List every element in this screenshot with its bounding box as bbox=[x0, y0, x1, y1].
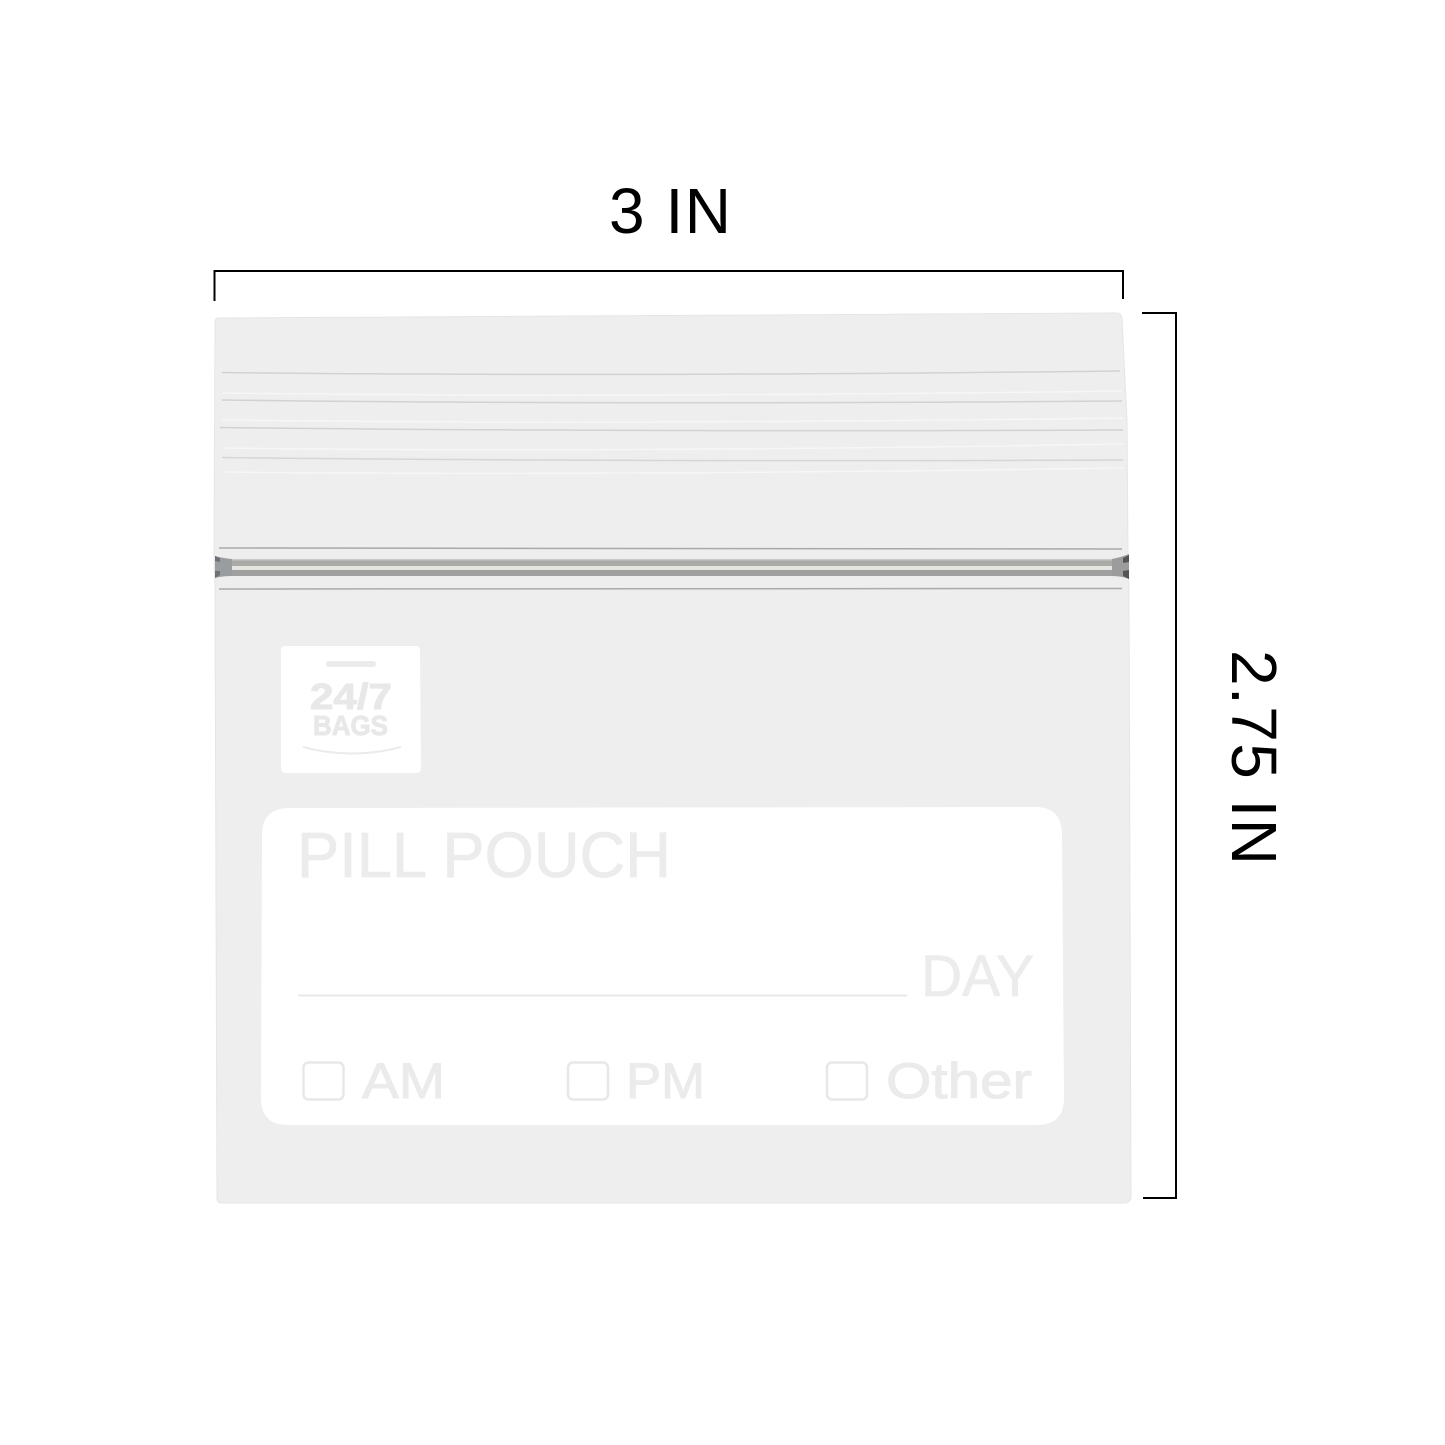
resealable flap lines bbox=[220, 371, 1124, 473]
day text: DAY bbox=[921, 944, 1034, 1009]
other checkbox bbox=[827, 1053, 1032, 1109]
height dimension label: 2.75 IN bbox=[1218, 650, 1290, 865]
width bracket bbox=[214, 271, 1123, 301]
brand logo: 24/7 bbox=[310, 676, 392, 717]
AM checkbox bbox=[304, 1053, 445, 1109]
label panel bbox=[261, 807, 1064, 1125]
pouch body bbox=[214, 313, 1131, 1203]
brand logo bbox=[281, 646, 421, 773]
other checkbox: Other bbox=[886, 1053, 1032, 1109]
brand logo: BAGS bbox=[313, 710, 388, 741]
zipper seal bbox=[215, 548, 1129, 589]
width dimension label: 3 IN bbox=[609, 175, 731, 247]
label title: PILL POUCH bbox=[297, 819, 671, 891]
PM checkbox: PM bbox=[626, 1053, 705, 1109]
PM checkbox bbox=[568, 1053, 705, 1109]
height bracket bbox=[1142, 313, 1176, 1198]
pouch bbox=[214, 313, 1131, 1203]
day write-in line bbox=[298, 994, 907, 996]
AM checkbox: AM bbox=[362, 1053, 445, 1109]
